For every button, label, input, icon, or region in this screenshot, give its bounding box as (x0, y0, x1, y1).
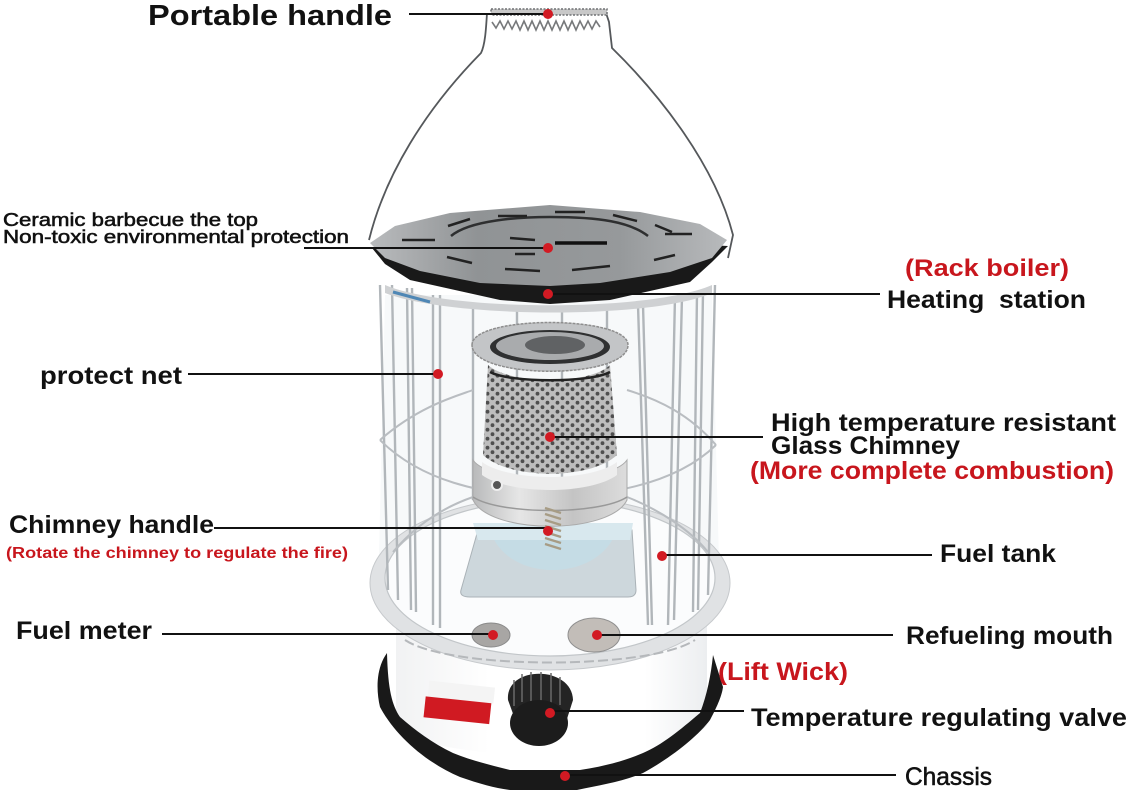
label: ceramic barbecue: Non-toxic environmental protection (3, 227, 349, 247)
red dots (433, 9, 667, 781)
plate edge (372, 240, 728, 304)
label: portable handle: Portable handle (148, 0, 392, 32)
top ceramic plate (370, 205, 728, 313)
label: lift wick: (Lift Wick) (718, 658, 848, 686)
refuel cap (568, 618, 620, 652)
ring (370, 496, 730, 670)
label: fuel meter: Fuel meter (16, 617, 152, 645)
label: heating station: Heating station (887, 286, 1086, 314)
chimney base (473, 460, 627, 526)
label: fuel tank: Fuel tank (940, 540, 1056, 568)
label: glass chimney: Glass Chimney (771, 432, 960, 460)
chimney mesh (483, 365, 617, 474)
label: protect net: protect net (40, 362, 183, 390)
label: refueling mouth: Refueling mouth (906, 622, 1113, 650)
heater body (396, 620, 707, 755)
chimney top flange (472, 322, 628, 371)
heater badge (424, 680, 495, 724)
plate underside rim (385, 285, 712, 313)
lower ring and base (370, 496, 730, 755)
label: chassis: Chassis (905, 763, 992, 791)
label: rotate the chimney: (Rotate the chimney to regulate the fire) (6, 545, 348, 562)
valve knob (508, 672, 573, 746)
label: glass chimney: High temperature resistant (771, 409, 1117, 437)
label: ceramic barbecue (3, 210, 349, 247)
fuel gauge (472, 623, 510, 647)
label: more complete combustion: (More complete combustion) (750, 457, 1114, 485)
fuel tank plate (461, 523, 636, 597)
plate top (370, 205, 727, 286)
interior backdrop (378, 295, 720, 600)
portable handle wire (369, 9, 733, 258)
protect net (380, 285, 716, 628)
icon: handle spring (491, 9, 607, 30)
label: glass chimney (771, 409, 1117, 460)
chassis band (378, 653, 723, 790)
leader lines (162, 14, 932, 775)
red badge panel (424, 696, 491, 724)
label: chimney handle: Chimney handle (9, 511, 214, 539)
label: rack boiler: (Rack boiler) (905, 255, 1069, 282)
chimney handle spring (545, 508, 561, 549)
label: temperature regulating valve: Temperature regulating valve (751, 704, 1127, 732)
chimney (472, 322, 628, 549)
label: ceramic barbecue: Ceramic barbecue the top (3, 210, 258, 230)
